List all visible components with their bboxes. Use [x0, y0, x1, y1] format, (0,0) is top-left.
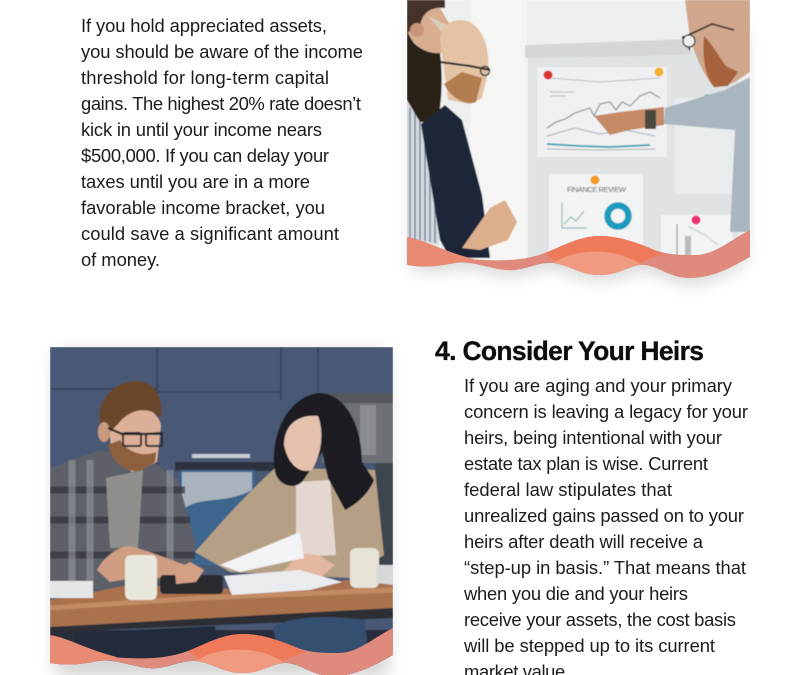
body text: estate planning paragraph: concern is leaving a legacy for your: [464, 401, 748, 422]
whiteboard: [525, 39, 738, 280]
photo: couple reviewing papers at a kitchen table: [50, 347, 393, 675]
finance review sheet: [549, 174, 643, 254]
body text: estate planning paragraph: heirs, being intentional with your: [464, 427, 722, 448]
body text: capital gains paragraph: gains. The highest 20% rate doesn’t: [81, 93, 361, 114]
wave band: [407, 230, 750, 278]
body text: capital gains paragraph: [81, 15, 363, 270]
person: bald man in navy shirt: [421, 20, 517, 258]
body text: estate planning paragraph: If you are aging and your primary: [464, 375, 733, 396]
finance review sheet: FINANCE REVIEW: [567, 185, 627, 194]
body text: estate planning paragraph: will be stepped up to its current: [463, 635, 715, 656]
body text: capital gains paragraph: If you hold appreciated assets,: [81, 15, 327, 36]
body text: estate planning paragraph: unrealized gains passed on to your: [464, 505, 744, 526]
body text: estate planning paragraph: receive your assets, the cost basis: [464, 609, 736, 630]
body text: capital gains paragraph: favorable income bracket, you: [81, 197, 325, 218]
body text: capital gains paragraph: of money.: [81, 249, 160, 270]
person: right man pointing at the chart: [594, 0, 750, 232]
wave band: [50, 628, 393, 675]
body text: estate planning paragraph: heirs after death will receive a: [464, 531, 704, 552]
body text: estate planning paragraph: [463, 375, 748, 675]
heading: 4. Consider Your Heirs: 4. Consider Your Heirs: [435, 336, 704, 366]
body text: capital gains paragraph: $500,000. If you can delay your: [81, 145, 329, 166]
body text: estate planning paragraph: “step-up in basis.” That means that: [464, 557, 746, 578]
chart sheet: [537, 67, 667, 157]
body text: capital gains paragraph: threshold for long-term capital: [81, 67, 329, 88]
table with papers, calculator and mugs: [50, 532, 393, 675]
body text: estate planning paragraph: estate tax plan is wise. Current: [464, 453, 708, 474]
small chart sheet: [661, 215, 733, 255]
person: left man with beard: [407, 0, 450, 245]
body text: estate planning paragraph: federal law stipulates that: [464, 479, 672, 500]
photo: team reviewing finance charts on a whiteboard: [407, 0, 750, 285]
kitchen background: [50, 347, 393, 631]
person: woman with dark hair and tan jacket: [195, 393, 384, 578]
body text: estate planning paragraph: when you die and your heirs: [463, 583, 688, 604]
person: man with glasses and plaid shirt: [50, 381, 196, 590]
body text: capital gains paragraph: taxes until you are in a more: [81, 171, 310, 192]
body text: capital gains paragraph: could save a significant amount: [81, 223, 339, 244]
body text: capital gains paragraph: you should be aware of the income: [81, 41, 363, 62]
body text: capital gains paragraph: kick in until your income nears: [81, 119, 322, 140]
